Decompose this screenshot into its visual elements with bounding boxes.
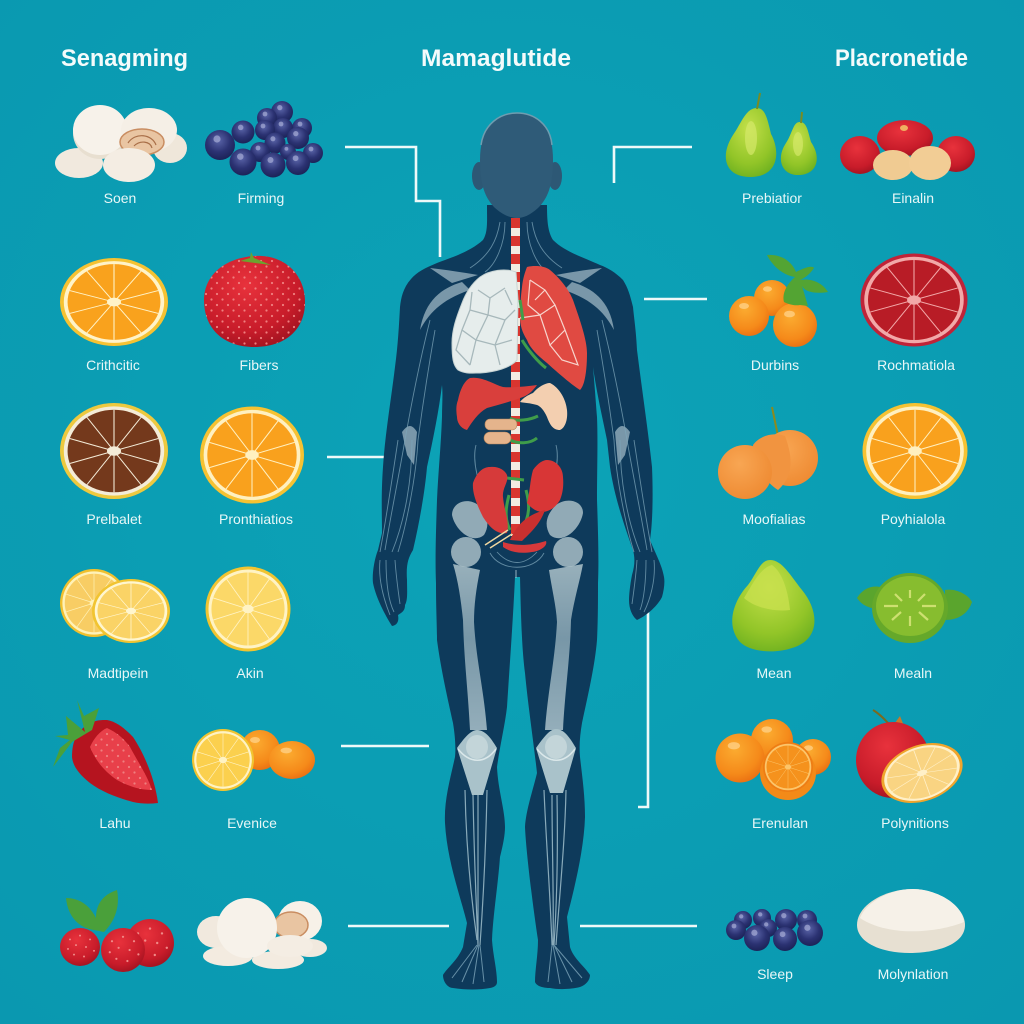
food: grapefruit bbox=[860, 254, 968, 346]
food: orange slice bbox=[200, 406, 304, 504]
human body figure bbox=[373, 113, 664, 990]
food: blueberries bbox=[726, 909, 823, 951]
food: white blob bbox=[857, 889, 965, 953]
label: Madtipein bbox=[88, 665, 148, 681]
food: kiwi bbox=[857, 573, 972, 643]
label: Fibers bbox=[240, 357, 278, 373]
label: Pronthiatios bbox=[219, 511, 293, 527]
label: Firming bbox=[238, 190, 284, 206]
label: Evenice bbox=[227, 815, 277, 831]
label: Moofialias bbox=[742, 511, 806, 527]
food: lemon and oranges bbox=[192, 729, 315, 791]
food: green pear bbox=[732, 560, 814, 651]
food: oranges with slice bbox=[716, 719, 831, 800]
food: apple with lemon bbox=[856, 710, 971, 814]
left kidney and bowel bbox=[473, 467, 508, 533]
label: Polynitions bbox=[881, 815, 949, 831]
connector lines bbox=[327, 147, 707, 926]
food: oranges bbox=[718, 407, 818, 499]
stomach bbox=[520, 383, 567, 430]
food: orange slice bbox=[862, 403, 968, 499]
food: orange slice bbox=[60, 258, 168, 346]
label: Prelbalet bbox=[86, 511, 142, 527]
food: pears bbox=[726, 93, 817, 177]
label: Rochmatiola bbox=[877, 357, 955, 373]
label: Mean bbox=[756, 665, 792, 681]
leg bones bbox=[453, 564, 583, 795]
foot lines bbox=[452, 945, 582, 984]
lower intestine bbox=[485, 510, 546, 553]
label: Mealn bbox=[894, 665, 932, 681]
green vessels bbox=[506, 300, 546, 530]
label: Lahu bbox=[99, 815, 131, 831]
label: Sleep bbox=[757, 966, 793, 982]
label: Durbins bbox=[751, 357, 799, 373]
food: lemon pair bbox=[60, 569, 170, 643]
food: strawberry round bbox=[204, 252, 305, 347]
spine bbox=[511, 218, 520, 536]
food: blueberries bbox=[205, 101, 323, 178]
body silhouette bbox=[373, 205, 664, 990]
title: left column: Senagming bbox=[61, 45, 188, 72]
title: right column: Placronetide bbox=[835, 45, 968, 72]
title: center column: Mamaglutide bbox=[421, 45, 571, 72]
right kidney bbox=[527, 460, 563, 512]
label: Akin bbox=[236, 665, 264, 681]
head bbox=[480, 113, 553, 218]
label: Einalin bbox=[892, 190, 934, 206]
food: brown citrus bbox=[60, 403, 168, 499]
food: strawberry bbox=[53, 700, 158, 804]
white lung bbox=[452, 270, 518, 373]
label: Poyhialola bbox=[881, 511, 946, 527]
food: mushrooms bbox=[197, 898, 327, 969]
liver bbox=[456, 378, 537, 430]
small intestine bbox=[484, 419, 517, 444]
food: berries with leaves bbox=[60, 890, 174, 972]
crotch line bbox=[515, 570, 517, 578]
label: Crithcitic bbox=[86, 357, 140, 373]
food: oranges with leaves bbox=[729, 255, 828, 347]
food: lemon slice bbox=[206, 566, 290, 652]
red lung bbox=[520, 266, 587, 390]
label: Soen bbox=[104, 190, 136, 206]
muscle lines bbox=[380, 222, 654, 615]
label: Prebiatior bbox=[742, 190, 802, 206]
label: Erenulan bbox=[752, 815, 808, 831]
food: red fruits with nuts bbox=[840, 120, 975, 180]
food: mushrooms bbox=[55, 105, 187, 182]
shoulder and arm bones bbox=[402, 268, 630, 465]
ears bbox=[472, 162, 562, 190]
label: Molynlation bbox=[878, 966, 948, 982]
shin bone lines bbox=[465, 790, 566, 945]
pelvis bbox=[451, 501, 583, 567]
